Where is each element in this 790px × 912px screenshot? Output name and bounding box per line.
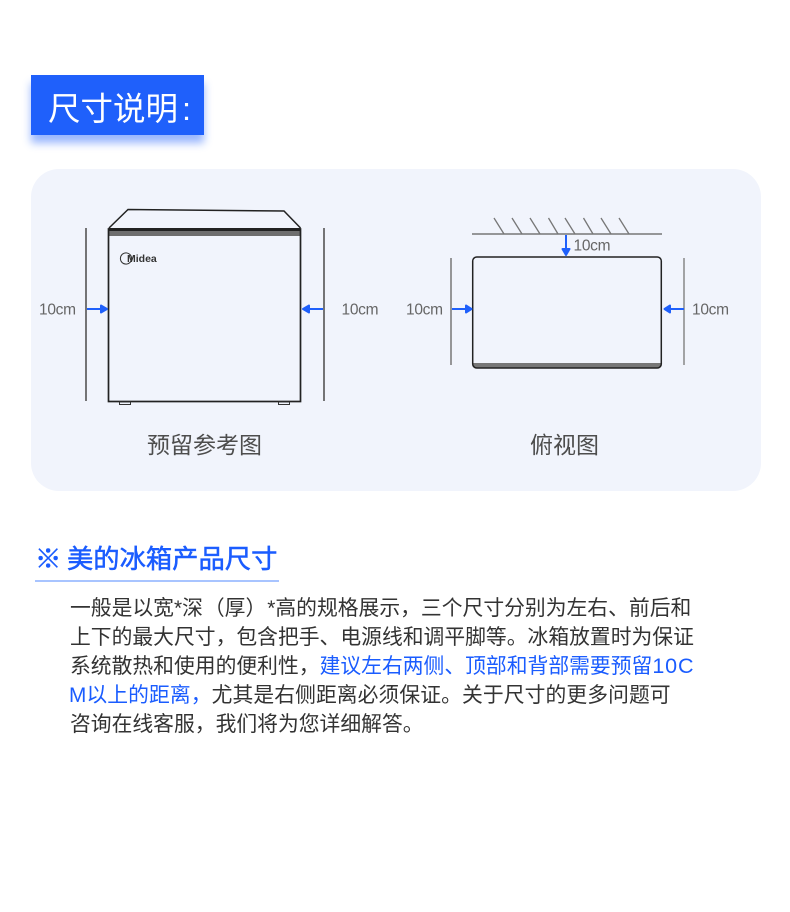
wall with hatching [472,218,662,234]
left side wall line [450,258,452,365]
label: back 10cm: 10cm [574,238,610,254]
text block: size description: M以上的距离，尤其是右侧距离必须保证。关于尺寸的更多问题可 [69,684,671,707]
text block: size description: 一般是以宽*深（厚）*高的规格展示，三个尺寸分别为左右、前后和 [70,597,691,620]
section heading: 美的冰箱产品尺寸 [35,540,279,582]
right side wall line [683,258,685,365]
icon: freezer top view [472,257,662,368]
text block: size description [69,596,694,736]
arrow: right clearance [664,306,684,312]
arrow: left clearance [87,306,107,312]
text block: size description: 咨询在线客服，我们将为您详细解答。 [70,713,424,736]
right wall line [323,228,325,401]
arrow: right clearance [303,306,323,312]
text block: size description: 系统散热和使用的便利性，建议左右两侧、顶部和背部需要预留10C [70,654,694,678]
text block: size description: 上下的最大尺寸，包含把手、电源线和调平脚等。冰箱放置时为保证 [70,626,694,649]
arrow: back clearance [562,235,570,255]
panel: installation clearance diagrams [31,169,761,491]
diagram: top view [406,218,729,458]
caption: 俯视图: 俯视图 [530,432,599,458]
caption: 预留参考图: 预留参考图 [147,432,262,458]
section heading: 美的冰箱产品尺寸: 美的冰箱产品尺寸 [67,544,277,574]
title badge: 尺寸说明 [31,75,204,135]
arrow: left clearance [452,306,472,312]
label: left 10cm: 10cm [406,302,443,318]
label: right 10cm: 10cm [692,302,729,318]
icon: freezer front view [108,210,300,404]
left wall line [85,228,87,401]
label: right 10cm: 10cm [342,302,378,318]
title badge: 尺寸说明: 尺寸说明: [48,91,191,127]
section heading: 美的冰箱产品尺寸: ※ [35,544,61,574]
diagram: clearance reference front view [39,210,378,458]
label: left 10cm: 10cm [39,302,76,318]
icon: Midea logo: Midea [127,253,157,265]
